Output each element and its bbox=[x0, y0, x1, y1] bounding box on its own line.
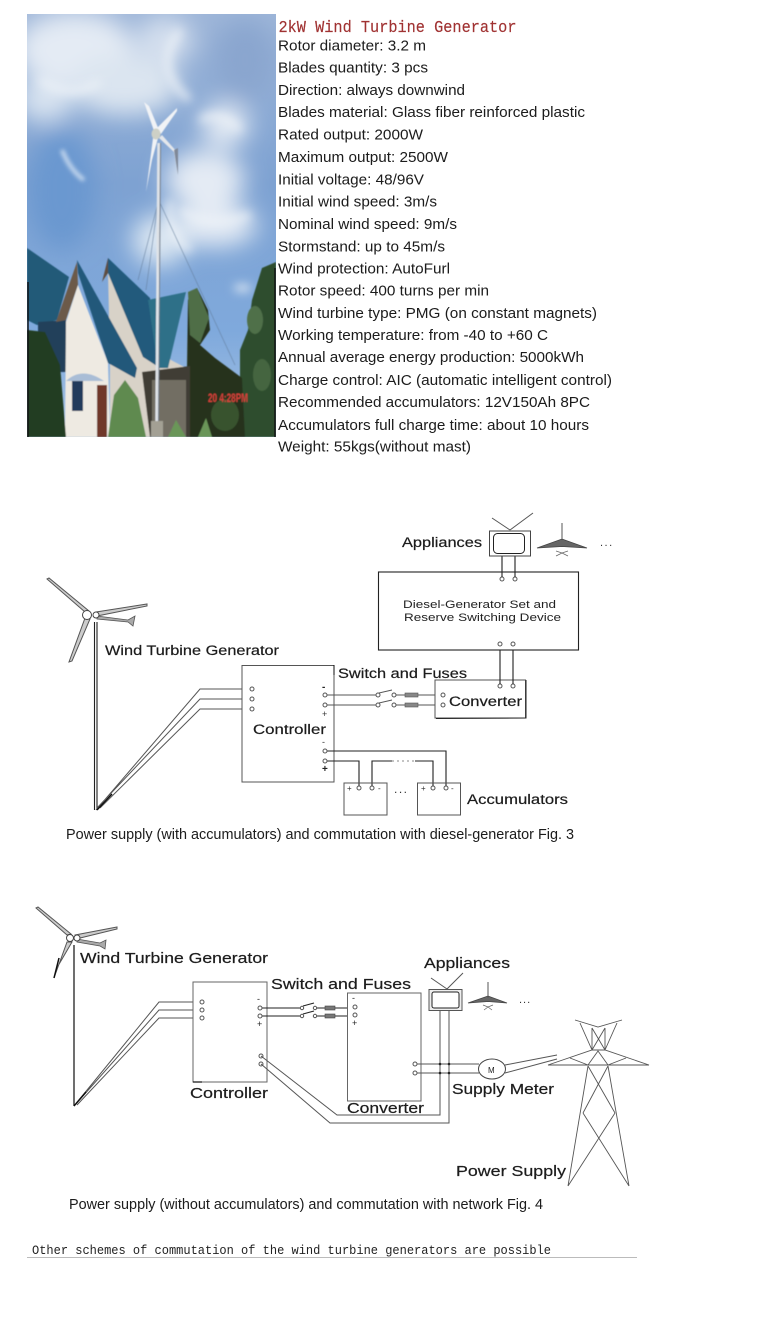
icon: supply meter bbox=[478, 1059, 506, 1079]
caption: figure 3: Power supply (with accumulators) and commutation with diesel-generator Fig. 3 bbox=[66, 827, 574, 843]
switch terminals bbox=[258, 1006, 317, 1018]
controller box: Controller bbox=[253, 722, 327, 737]
wires: converter to diesel set bbox=[500, 644, 513, 684]
controller box: + bbox=[257, 1019, 262, 1029]
diagram: power supply without accumulators, network commutation bbox=[36, 907, 649, 1186]
umbrella bbox=[66, 374, 104, 381]
converter box: - bbox=[352, 993, 355, 1003]
controller box: + bbox=[322, 709, 327, 719]
controller box: - bbox=[322, 737, 325, 747]
spec: nominal wind speed: Nominal wind speed: 9m/s bbox=[278, 216, 457, 233]
icon: fuses bbox=[405, 693, 418, 707]
converter box bbox=[435, 680, 526, 718]
right roof bbox=[148, 292, 186, 368]
switch label: Switch and Fuses bbox=[338, 666, 467, 681]
turbine rotor bbox=[144, 102, 178, 192]
icon: fuses bbox=[325, 1006, 335, 1018]
wires: turbine to controller bbox=[74, 1002, 202, 1106]
door bbox=[97, 385, 107, 437]
spec: wind protection: Wind protection: AutoFurl bbox=[278, 261, 450, 278]
spec: weight: Weight: 55kgs(without mast) bbox=[278, 439, 471, 456]
spec: annual production: Annual average energy production: 5000kWh bbox=[278, 349, 584, 366]
power supply label: Power Supply bbox=[456, 1164, 567, 1180]
turbine label: Wind Turbine Generator bbox=[80, 951, 268, 967]
switch label: Switch and Fuses bbox=[271, 977, 411, 993]
diesel generator set box: Diesel-Generator Set and bbox=[403, 599, 556, 611]
spec: stormstand: Stormstand: up to 45m/s bbox=[278, 239, 445, 256]
icon: lamp bbox=[468, 982, 507, 1010]
spec: charge time: Accumulators full charge time: about 10 hours bbox=[278, 417, 589, 434]
background trees bbox=[186, 262, 276, 437]
spec: initial voltage: Initial voltage: 48/96V bbox=[278, 172, 424, 189]
spec: blades material: Blades material: Glass fiber reinforced plastic bbox=[278, 104, 586, 121]
accumulators: + bbox=[421, 784, 426, 793]
spec: maximum output: Maximum output: 2500W bbox=[278, 149, 449, 166]
left roof bbox=[27, 248, 69, 325]
controller box: - bbox=[257, 994, 260, 1004]
accumulators: ... bbox=[394, 782, 409, 796]
icon: lamp bbox=[537, 523, 587, 556]
specification list: Rotor diameter: 3.2 m bbox=[278, 38, 426, 54]
spec: initial wind speed: Initial wind speed: 3m/s bbox=[278, 194, 437, 211]
controller label: Controller bbox=[190, 1086, 268, 1102]
footnote: Other schemes of commutation of the wind turbine generators are possible bbox=[32, 1244, 551, 1258]
ellipsis: more appliances: ... bbox=[600, 537, 614, 549]
infographic canvas bbox=[27, 14, 650, 1258]
accumulators bbox=[323, 749, 460, 815]
caption: figure 4: Power supply (without accumulators) and commutation with network Fig. 4 bbox=[69, 1197, 543, 1213]
rear house wall bbox=[108, 273, 190, 437]
wires: turbine to controller bbox=[96, 689, 252, 810]
converter label: Converter bbox=[347, 1101, 424, 1117]
photo: wind turbine above a blue-roofed house bbox=[15, 12, 276, 437]
middle roof brown edge bbox=[102, 258, 109, 282]
diesel generator set box bbox=[378, 572, 578, 650]
supply meter label: Supply Meter bbox=[452, 1082, 554, 1098]
icon: wind turbine bbox=[36, 907, 117, 978]
wires: controller to converter via switches and fuses bbox=[260, 1003, 355, 1016]
icon: supply meter: M bbox=[488, 1066, 495, 1075]
accumulators label: Accumulators bbox=[467, 792, 568, 807]
icon: transmission tower bbox=[548, 1020, 649, 1186]
controller box bbox=[242, 665, 334, 782]
guy wires bbox=[138, 203, 235, 365]
front roof bbox=[77, 260, 137, 378]
controller box: + bbox=[322, 764, 328, 775]
converter box bbox=[348, 993, 421, 1101]
wires: converter to meter bbox=[417, 1063, 479, 1074]
controller box: - bbox=[322, 682, 325, 693]
ellipsis: more appliances: ... bbox=[519, 994, 531, 1006]
wires: controller to accumulators bbox=[325, 751, 446, 786]
diagram: power supply with accumulators and diesel generator bbox=[47, 513, 614, 815]
palm bbox=[168, 418, 212, 437]
spec: recommended accumulators: Recommended accumulators: 12V150Ah 8PC bbox=[278, 394, 590, 411]
icon: television bbox=[429, 973, 463, 1010]
specification list bbox=[278, 38, 612, 456]
spec: direction: Direction: always downwind bbox=[278, 82, 465, 99]
window bbox=[72, 381, 83, 411]
spec: rotor speed: Rotor speed: 400 turns per min bbox=[278, 283, 489, 300]
spec: rated output: Rated output: 2000W bbox=[278, 127, 424, 144]
controller box bbox=[193, 982, 267, 1082]
diesel generator set box: Reserve Switching Device bbox=[404, 612, 561, 624]
front gable brown edge bbox=[56, 262, 78, 322]
accumulators: - bbox=[451, 784, 454, 793]
front gable wall bbox=[65, 285, 110, 437]
switch terminals bbox=[323, 693, 396, 707]
accumulators: + bbox=[347, 784, 352, 793]
left tree bbox=[27, 330, 66, 437]
spec: charge control: Charge control: AIC (automatic intelligent control) bbox=[278, 372, 612, 389]
spec: working temperature: Working temperature: from -40 to +60 C bbox=[278, 327, 548, 344]
turbine label: Wind Turbine Generator bbox=[105, 643, 280, 658]
heading: 2kW Wind Turbine Generator bbox=[278, 18, 516, 37]
mast bbox=[157, 143, 159, 423]
photo edge marks bbox=[28, 268, 275, 437]
mast base bbox=[151, 421, 163, 437]
appliances label: Appliances bbox=[424, 956, 510, 972]
icon: television bbox=[490, 513, 533, 556]
converter box: Converter bbox=[449, 694, 523, 709]
converter box: + bbox=[352, 1018, 357, 1028]
middle roof bbox=[108, 258, 160, 368]
wires: controller through switches and fuses to converter bbox=[325, 690, 443, 705]
shrub bbox=[108, 380, 146, 437]
dark lower wall bbox=[142, 366, 190, 437]
accumulators: - bbox=[378, 784, 381, 793]
wires: controller bypass to appliances bbox=[261, 1010, 449, 1123]
appliances label: Appliances bbox=[402, 535, 482, 550]
photo timestamp: 20 4:28PM bbox=[208, 391, 248, 405]
wires: appliances to diesel set bbox=[502, 556, 515, 577]
spec: blades quantity: Blades quantity: 3 pcs bbox=[278, 60, 428, 77]
wires: meter to tower bbox=[505, 1055, 557, 1073]
icon: wind turbine bbox=[47, 578, 147, 662]
spec: turbine type: Wind turbine type: PMG (on constant magnets) bbox=[278, 305, 597, 322]
